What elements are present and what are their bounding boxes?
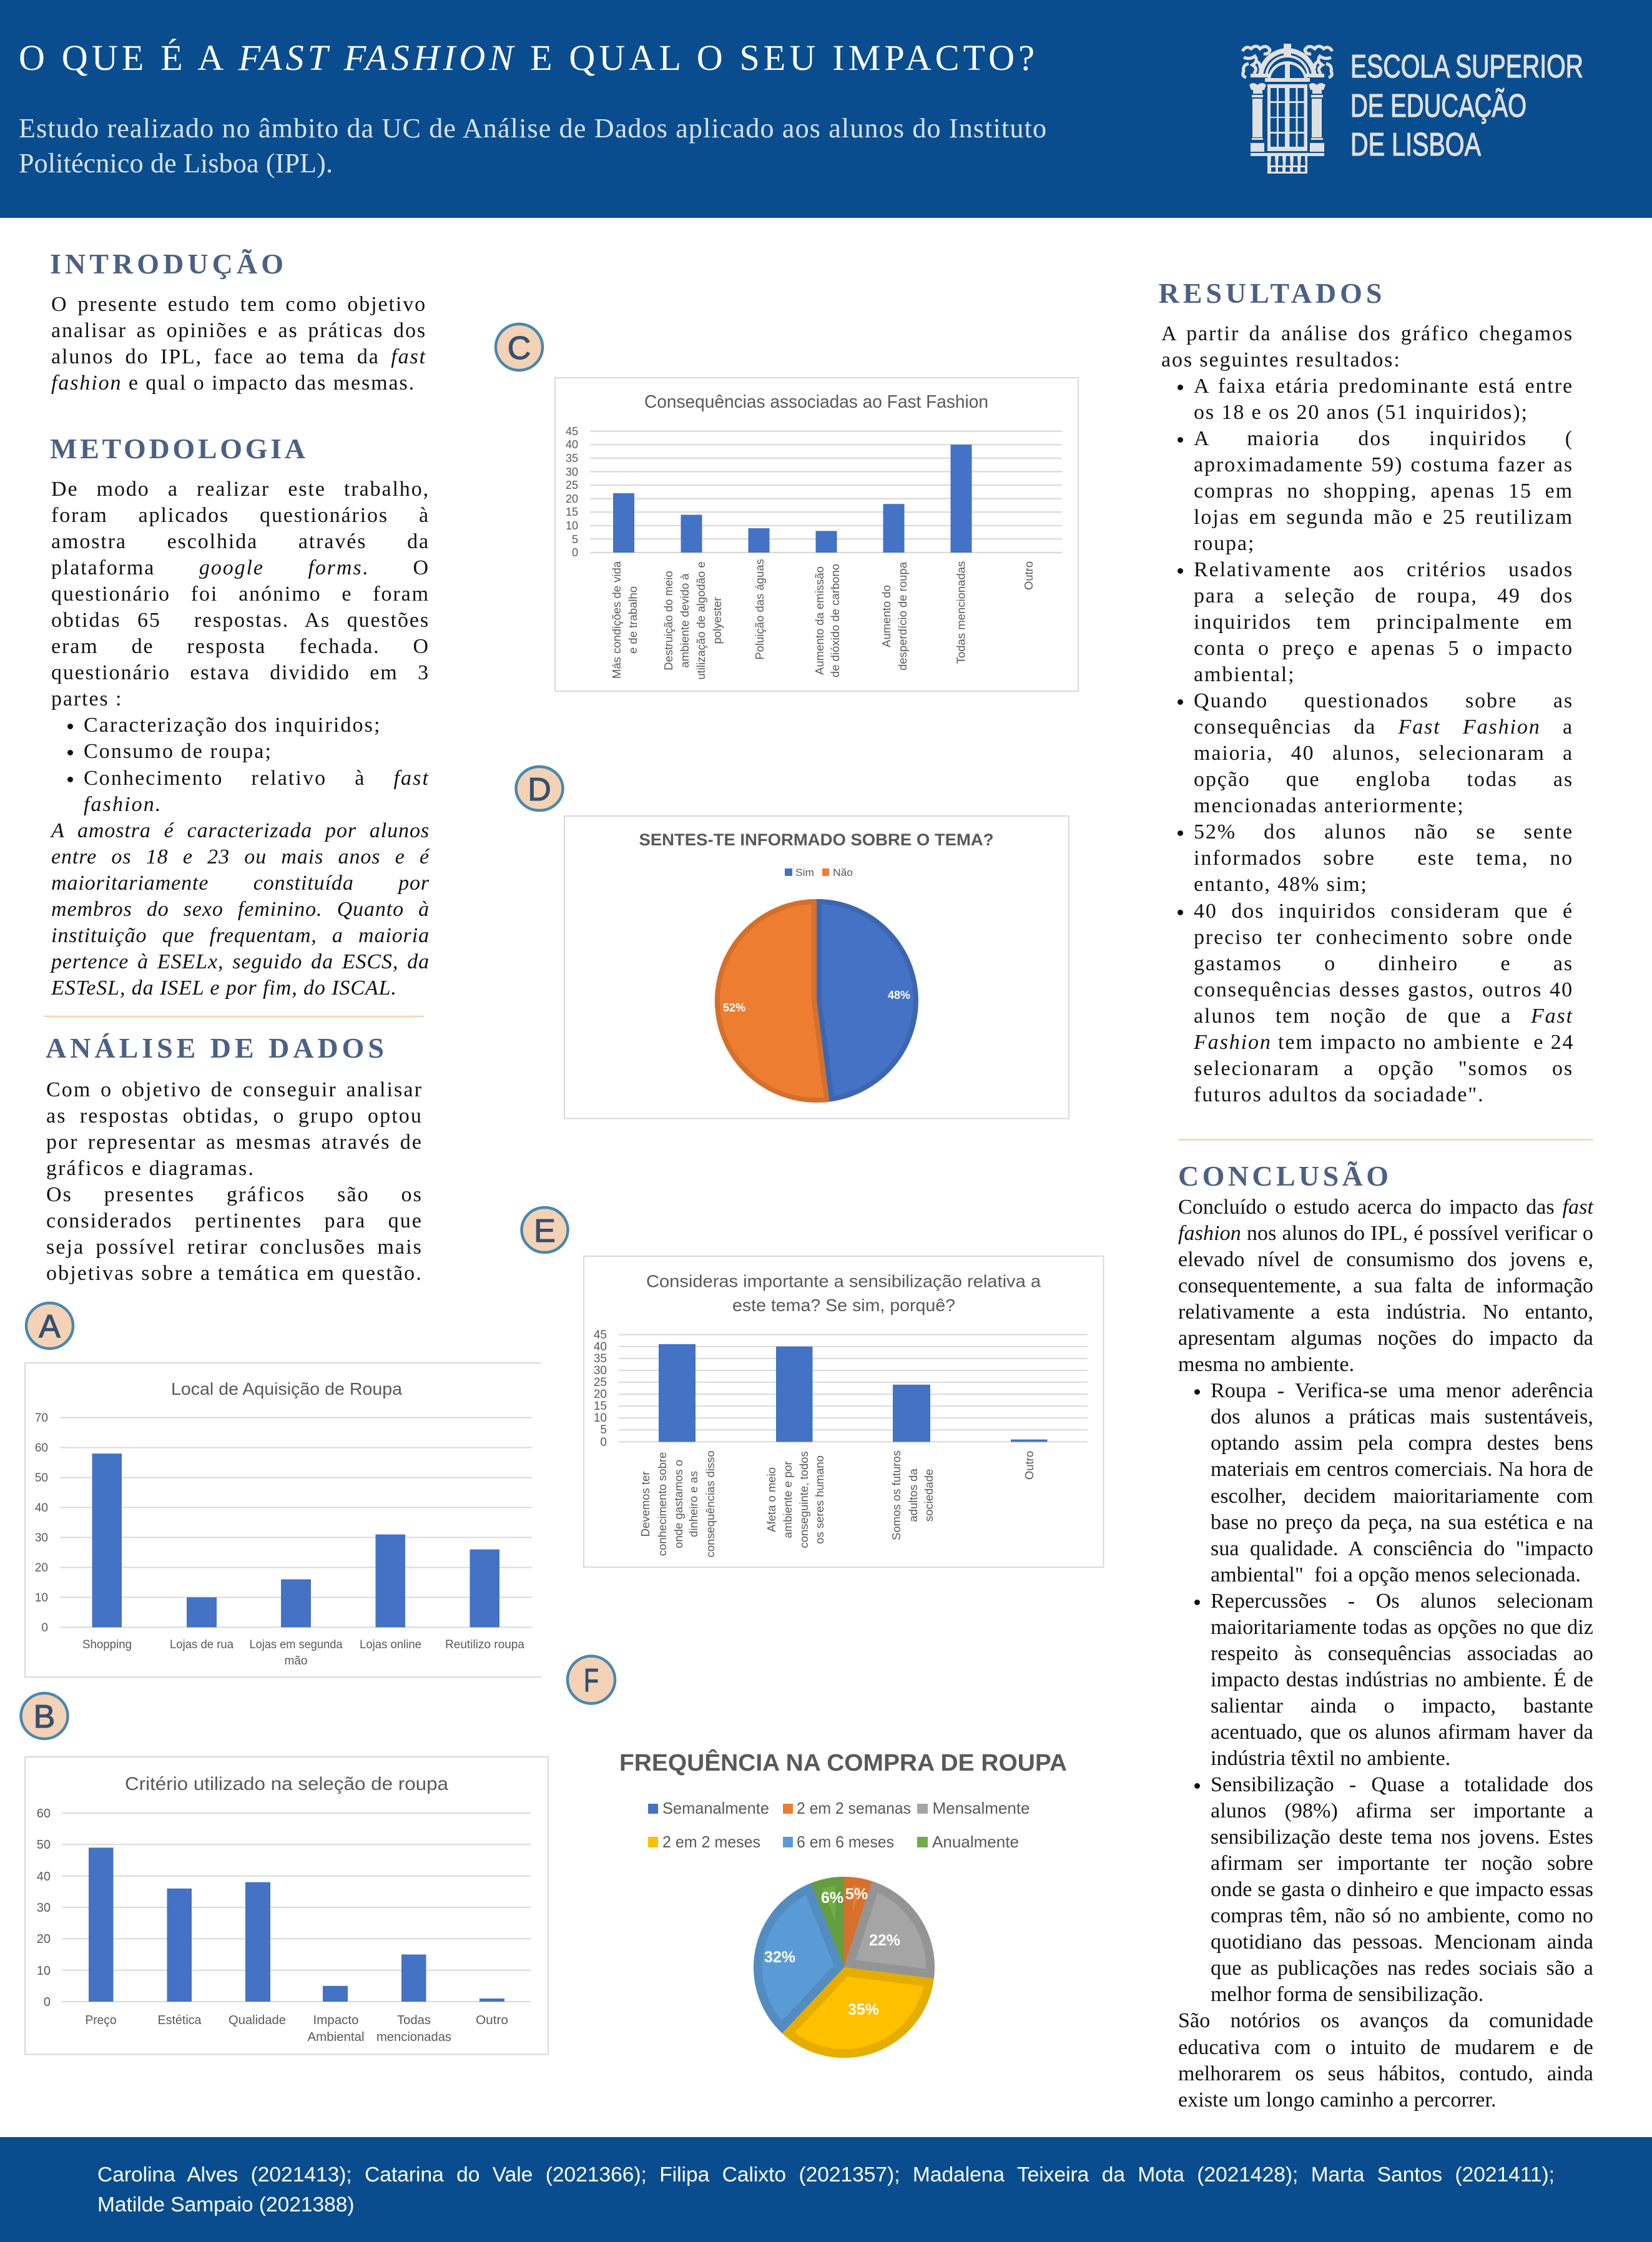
chart E category labels: conhecimento sobre [656, 1452, 669, 1556]
chart F legend: Semanalmente [662, 1799, 769, 1817]
chart B axis values: 10 [37, 1964, 51, 1978]
text: Resultados [1161, 322, 1574, 1106]
heading: Análise de Dados: ANÁLISE DE DADOS [46, 1032, 384, 1064]
chart B title: Critério utilizado na seleção de roupa [125, 1774, 448, 1794]
list: conclusões: compras têm, não só no ambiente, como no [1211, 1904, 1593, 1927]
chart C axis values: 15 [566, 506, 578, 518]
list: resultados: entanto, 48% sim; [1194, 873, 1368, 896]
text: Resultados: A partir da análise dos gráfico chegamos [1161, 322, 1573, 345]
text: caracterização da amostra: membros do sexo feminino. Quanto à [51, 898, 430, 921]
list: conclusões: salientar ainda o impacto, bastante [1211, 1694, 1593, 1718]
chart B axis values: 30 [37, 1901, 51, 1915]
list: conclusões [1194, 1379, 1593, 2006]
list: conclusões: dos alunos a práticas mais sustentáveis, [1211, 1405, 1593, 1428]
text: Análise de Dados [46, 1078, 423, 1285]
chart C category labels: Aumento do [880, 585, 893, 647]
chart A category labels: mão [285, 1654, 307, 1668]
list: conclusões: impacto destas indústrias no ambiente. É de [1211, 1668, 1593, 1691]
chart D title: SENTES-TE INFORMADO SOBRE O TEMA? [639, 830, 994, 849]
text: nota final: existe um longo caminho a percorrer. [1178, 2088, 1497, 2112]
text: Conclusão [1178, 1196, 1594, 2112]
chart B axis values: 40 [37, 1870, 51, 1884]
chart A category labels [82, 1638, 524, 1668]
list: partes do questionário: Consumo de roupa; [84, 740, 272, 763]
ornaments [1242, 46, 1332, 77]
chart E title: este tema? Se sim, porquê? [732, 1296, 955, 1315]
chart E axis values [594, 1329, 607, 1449]
chart C category labels: Aumento da emissão [813, 566, 826, 675]
list: resultados: alunos tem noção de que a Fast [1194, 1005, 1573, 1028]
text: caracterização da amostra [50, 819, 430, 1000]
text: Análise de Dados: as respostas obtidas, o grupo optou [46, 1104, 423, 1128]
icon: window emblem [1242, 44, 1332, 174]
chart C axis values: 20 [566, 493, 578, 505]
text: caracterização da amostra: maioritariamente constituída por [51, 872, 430, 895]
chart C category labels: desperdício de roupa [896, 561, 909, 671]
text: Análise de Dados: gráficos e diagramas. [46, 1157, 255, 1180]
footer: autores: Carolina Alves (2021413); Catarina do Vale (2021366); Filipa Calixto (2021357); Madalena Teixeira da Mota (2021428); Marta Santos (2021411); [97, 2163, 1555, 2186]
logo text: ESCOLA SUPERIOR [1350, 48, 1583, 84]
text: Conclusão: elevado nível de consumismo dos jovens e, [1178, 1248, 1593, 1271]
chart C category labels: Outro [1022, 561, 1035, 590]
logo: Escola Superior de Educação de Lisboa [1242, 44, 1583, 174]
chart D legend [785, 867, 853, 878]
badge F [568, 1656, 615, 1703]
list: resultados: opção que engloba todas as [1194, 768, 1573, 791]
list: conclusões: respeito às consequências associadas ao [1211, 1642, 1593, 1665]
text: Resultados: aos seguintes resultados: [1161, 348, 1401, 371]
list: conclusões: escolher, decidem maioritariamente com [1211, 1485, 1593, 1508]
badge D: D [528, 772, 551, 808]
chart E axis values: 5 [600, 1423, 607, 1437]
list: partes do questionário: Conhecimento relativo à fast [84, 767, 430, 790]
badge E [522, 1207, 568, 1252]
chart B category labels: Outro [476, 2013, 508, 2027]
chart C category labels: Poluição das águas [753, 559, 766, 660]
chart F title: FREQUÊNCIA NA COMPRA DE ROUPA [619, 1749, 1067, 1776]
header band [0, 0, 1652, 218]
title: O QUE É A FAST FASHION E QUAL O SEU IMPACTO? [19, 37, 1035, 78]
chart A title: Local de Aquisição de Roupa [171, 1379, 402, 1399]
chart A axis values: 0 [41, 1621, 48, 1635]
chart C axis values: 5 [572, 533, 578, 546]
text: nota final [1178, 2009, 1593, 2112]
list: resultados: Fashion tem impacto no ambiente e 24 [1194, 1031, 1574, 1054]
text: Conclusão: relativamente a esta indústria. No entanto, [1178, 1300, 1593, 1324]
subtitle [19, 113, 1046, 179]
chart F legend: 2 em 2 semanas [797, 1799, 911, 1817]
list: resultados: A faixa etária predominante está entre [1194, 375, 1573, 398]
badge B [21, 1693, 67, 1739]
chart F legend: Anualmente [932, 1832, 1019, 1851]
chart D pie: 48% [888, 989, 910, 1001]
logo text [1350, 48, 1583, 162]
list: conclusões: melhor forma de sensibilização. [1211, 1983, 1483, 2006]
list: resultados: inquiridos tem principalmente em [1194, 611, 1573, 634]
chart E category labels: consequências disso [704, 1451, 717, 1557]
list: resultados: consequências da Fast Fashion a [1194, 715, 1573, 739]
chart F pie: 6% [821, 1889, 843, 1907]
text: nota final: melhorarem os seus hábitos, contudo, ainda [1178, 2062, 1593, 2085]
chart C: Consequências associadas ao Fast Fashion [555, 378, 1078, 691]
footer: autores [97, 2163, 1555, 2216]
badge B: B [34, 1699, 55, 1735]
chart F legend: 2 em 2 meses [662, 1832, 760, 1851]
text: Conclusão: apresentam algumas noções do impacto da [1178, 1327, 1593, 1350]
chart C axis values: 25 [566, 479, 578, 491]
chart E axis values: 35 [594, 1352, 607, 1365]
chart F pie: 35% [848, 2001, 879, 2018]
text: caracterização da amostra: instituição que frequentam, a maioria [51, 924, 430, 947]
chart A category labels: Shopping [82, 1638, 132, 1651]
chart C category labels: polyester [710, 597, 724, 644]
chart E category labels: Somos os futuros [890, 1450, 903, 1540]
list: resultados: Quando questionados sobre as [1194, 689, 1573, 712]
chart F: Frequência na compra de roupa [619, 1749, 1067, 2058]
logo text: DE EDUCAÇÃO [1350, 87, 1527, 124]
list: conclusões: sensibilização deste tema nos jovens. Estes [1211, 1826, 1593, 1849]
chart E axis values: 45 [594, 1329, 607, 1342]
text: Conclusão: fashion nos alunos do IPL, é possível verificar o [1178, 1222, 1593, 1245]
chart F pie: 22% [869, 1932, 900, 1949]
list: conclusões: Repercussões - Os alunos selecionam [1211, 1590, 1593, 1613]
chart E category labels: ambiente e por [781, 1461, 794, 1538]
chart A bars [92, 1453, 499, 1627]
list: resultados [1178, 375, 1574, 1106]
list: conclusões: Roupa - Verifica-se uma menor aderência [1211, 1379, 1593, 1402]
text: caracterização da amostra: entre os 18 e 23 ou mais anos e é [51, 845, 430, 868]
list: resultados: roupa; [1194, 532, 1255, 555]
chart F legend: Mensalmente [933, 1799, 1030, 1817]
chart C category labels: e de trabalho [626, 586, 639, 654]
chart E axis values: 0 [600, 1436, 607, 1449]
text: Introdução: O presente estudo tem como objetivo [51, 292, 426, 316]
chart B category labels: Impacto [313, 2013, 358, 2027]
chart C axis values: 0 [572, 546, 578, 559]
subtitle: Politécnico de Lisboa (IPL). [19, 148, 333, 179]
chart E category labels: Outro [1023, 1451, 1036, 1480]
text: Análise de Dados: Os presentes gráficos são os [46, 1183, 423, 1206]
chart A category labels: Lojas online [360, 1638, 421, 1651]
list: conclusões: indústria têxtil no ambiente. [1211, 1747, 1450, 1770]
chart A axis values: 30 [35, 1532, 48, 1545]
badge C [496, 324, 543, 370]
list: resultados: conta o preço e apenas 5 o impacto [1194, 637, 1573, 660]
list: resultados: compras no shopping, apenas 15 em [1194, 479, 1573, 503]
chart E title: Consideras importante a sensibilização relativa a [646, 1271, 1041, 1291]
chart D pie: 52% [723, 1001, 745, 1014]
subtitle: Estudo realizado no âmbito da UC de Análise de Dados aplicado aos alunos do Instituto [19, 113, 1046, 144]
chart D legend: Não [833, 867, 853, 878]
text: Análise de Dados: por representar as mesmas através de [46, 1131, 423, 1154]
chart A axis values [35, 1412, 48, 1635]
list: partes do questionário: fashion. [84, 793, 162, 816]
chart C category labels: utilização de algodão e [694, 561, 707, 680]
list: resultados: gastamos o dinheiro e as [1194, 952, 1573, 975]
text: caracterização da amostra: pertence à ESELx, seguido da ESCS, da [51, 950, 430, 973]
heading: Conclusão: CONCLUSÃO [1178, 1160, 1389, 1192]
chart F pie [754, 1877, 935, 2058]
chart E title [646, 1271, 1041, 1315]
chart E category labels: Devemos ter [639, 1472, 652, 1536]
chart F legend: 6 em 6 meses [797, 1832, 894, 1851]
chart C axis values [566, 425, 578, 559]
list: resultados: ambiental; [1194, 663, 1296, 686]
chart E category labels: os seres humano [813, 1455, 826, 1544]
chart E category labels: Afeta o meio [765, 1467, 778, 1532]
chart C category labels: Más condições de vida [610, 561, 623, 679]
list: resultados: Relativamente aos critérios usados [1194, 558, 1573, 581]
heading: Metodologia: METODOLOGIA [50, 433, 305, 465]
list: resultados: preciso ter conhecimento sobre onde [1194, 926, 1573, 949]
chart B bars [89, 1847, 504, 2002]
chart B axis values: 20 [37, 1932, 51, 1946]
logo text: DE LISBOA [1350, 126, 1481, 162]
text: Metodologia: eram de resposta fechada. O [51, 635, 430, 658]
chart E axis values: 30 [594, 1364, 607, 1377]
heading: Resultados: RESULTADOS [1159, 277, 1382, 309]
badge E: E [534, 1213, 556, 1249]
chart A axis values: 10 [35, 1591, 48, 1605]
list: resultados: para a seleção de roupa, 49 dos [1194, 584, 1573, 607]
list: resultados: mencionadas anteriormente; [1194, 794, 1465, 817]
text: Introdução: alunos do IPL, face ao tema da fast [51, 345, 426, 368]
chart C axis values: 30 [566, 466, 578, 478]
list: conclusões: onde se gasta o dinheiro e que impacto essas [1211, 1878, 1593, 1901]
chart C bars [613, 445, 971, 553]
chart D legend: Sim [795, 867, 814, 878]
chart D pie [715, 899, 918, 1103]
chart E category labels: onde gastamos o [672, 1460, 685, 1548]
chart B category labels: Preço [85, 2013, 116, 2027]
list: resultados: aproximadamente 59) costuma fazer as [1194, 453, 1573, 476]
text: Conclusão: mesma no ambiente. [1178, 1353, 1354, 1376]
chart E axis values: 20 [594, 1388, 607, 1401]
list: conclusões: optando assim pela compra destes bens [1211, 1432, 1593, 1455]
text: Metodologia: De modo a realizar este trabalho, [51, 478, 430, 501]
chart E category labels: dinheiro e as [687, 1471, 700, 1537]
list: partes do questionário: Caracterização dos inquiridos; [84, 714, 381, 737]
text: Análise de Dados: objetivas sobre a temática em questão. [46, 1262, 423, 1285]
chart A category labels: Reutilizo roupa [445, 1638, 524, 1651]
text: nota final: São notórios os avanços da comunidade [1178, 2009, 1593, 2032]
list: conclusões: sua qualidade. A consciência do "impacto [1211, 1537, 1593, 1560]
chart E axis values: 25 [594, 1376, 607, 1389]
chart B category labels: Qualidade [229, 2013, 286, 2027]
list: resultados: consequências desses gastos, outros 40 [1194, 978, 1573, 1001]
chart B axis values: 50 [37, 1838, 51, 1852]
text: Metodologia: amostra escolhida através da [51, 530, 430, 553]
chart A category labels: Lojas de rua [170, 1638, 234, 1651]
list: conclusões: quotidiano das pessoas. Mencionam ainda [1211, 1930, 1593, 1954]
chart E category labels: conseguinte, todos [797, 1451, 810, 1548]
chart C axis values: 45 [566, 425, 578, 438]
chart B category labels: Ambiental [307, 2030, 365, 2044]
text: Metodologia: plataforma google forms. O [51, 556, 430, 579]
chart C category labels: ambiente devido à [678, 573, 691, 668]
chart F pie: 5% [845, 1886, 868, 1903]
list: resultados: 40 dos inquiridos consideram que é [1194, 900, 1573, 923]
list: conclusões: afirmam ser importante ter noção sobre [1211, 1852, 1593, 1875]
badge D [516, 767, 563, 810]
chart A category labels: Lojas em segunda [250, 1638, 343, 1651]
text: Metodologia: questionário estava dividido em 3 [51, 661, 430, 684]
chart B category labels: mencionadas [376, 2030, 451, 2044]
chart B: Critério utilizado na seleção de roupa [25, 1757, 548, 2054]
list: conclusões: base no preço da peça, na sua estética e na [1211, 1511, 1593, 1534]
chart A: Local de Aquisição de Roupa [25, 1363, 541, 1677]
chart B category labels: Todas [397, 2013, 431, 2027]
chart A axis values: 60 [35, 1442, 48, 1455]
list: conclusões: materiais em centros comerciais. Na hora de [1211, 1458, 1593, 1481]
badge A [26, 1303, 73, 1349]
chart A axis values: 50 [35, 1472, 48, 1485]
text: Conclusão: consequentemente, a sua falta de informação [1178, 1274, 1593, 1297]
text: Introdução: analisar as opiniões e as práticas dos [51, 319, 426, 342]
chart F pie: 32% [764, 1949, 795, 1966]
text: Metodologia: partes : [51, 687, 122, 710]
chart C axis values: 10 [566, 519, 578, 532]
text: Análise de Dados: seja possível retirar conclusões mais [46, 1236, 423, 1259]
chart C category labels: de dióxido de carbono [828, 564, 842, 677]
chart E category labels: adultos da [907, 1468, 920, 1522]
text: Metodologia [50, 478, 430, 1000]
footer band [0, 2137, 1652, 2242]
badge C: C [508, 330, 531, 366]
chart B category labels: Estética [157, 2013, 202, 2027]
badge F: F [584, 1663, 599, 1699]
list: resultados: futuros adultos da sociadade". [1194, 1083, 1485, 1106]
text: Conclusão: Concluído o estudo acerca do impacto das fast [1178, 1196, 1593, 1219]
chart E axis values: 40 [594, 1340, 607, 1354]
list: resultados: 52% dos alunos não se sente [1194, 820, 1573, 843]
chart E category labels: sociedade [922, 1469, 935, 1522]
chart E axis values: 10 [594, 1412, 607, 1425]
list: conclusões: maioritariamente todas as opções no que diz [1211, 1616, 1593, 1639]
badge A: A [39, 1309, 61, 1345]
chart C axis values: 35 [566, 452, 578, 465]
chart C category labels: Todas mencionadas [954, 561, 968, 664]
list: partes do questionário [67, 714, 430, 816]
text: Introdução [51, 292, 426, 395]
chart A axis values: 40 [35, 1502, 48, 1515]
list: conclusões: Sensibilização - Quase a totalidade dos [1211, 1773, 1593, 1796]
list: resultados: informados sobre este tema, no [1194, 847, 1573, 870]
chart A axis values: 20 [35, 1561, 48, 1575]
chart B category labels [85, 2013, 508, 2044]
text: caracterização da amostra: A amostra é caracterizada por alunos [51, 819, 430, 842]
text: Metodologia: obtidas 65 respostas. As questões [51, 609, 430, 632]
text: Metodologia: foram aplicados questionários à [51, 504, 430, 527]
chart C axis values: 40 [566, 438, 578, 451]
text: Introdução: fashion e qual o impacto das mesmas. [51, 371, 415, 395]
chart E bars [659, 1344, 1048, 1442]
text: caracterização da amostra: ESTeSL, da ISEL e por fim, do ISCAL. [51, 976, 397, 1000]
chart B axis values [37, 1807, 51, 2009]
list: resultados: selecionaram a opção "somos os [1194, 1057, 1573, 1080]
text: Análise de Dados: Com o objetivo de conseguir analisar [46, 1078, 423, 1101]
chart C category labels [610, 559, 1035, 680]
chart C title: Consequências associadas ao Fast Fashion [644, 392, 988, 412]
list: resultados: A maioria dos inquiridos ( [1194, 427, 1573, 450]
heading: Introdução: INTRODUÇÃO [50, 248, 283, 280]
text: Análise de Dados: considerados pertinentes para que [46, 1209, 423, 1232]
list: conclusões: que as publicações nas redes sociais são a [1211, 1957, 1593, 1980]
footer: autores: Matilde Sampaio (2021388) [97, 2193, 355, 2216]
list: resultados: maioria, 40 alunos, selecionaram a [1194, 742, 1573, 765]
text: nota final: educativa com o intuito de mudarem e de [1178, 2035, 1593, 2059]
list: resultados: lojas em segunda mão e 25 reutilizam [1194, 506, 1573, 529]
chart B axis values: 0 [44, 1995, 51, 2009]
chart C category labels: Destruição do meio [662, 571, 675, 671]
chart E: Consideras importante a sensibilização [584, 1256, 1104, 1567]
list: conclusões: acentuado, que os alunos afirmam haver da [1211, 1721, 1593, 1744]
chart D: Sentes-te informado sobre o tema? [564, 816, 1069, 1119]
chart E axis values: 15 [594, 1400, 607, 1413]
list: resultados: os 18 e os 20 anos (51 inquiridos); [1194, 401, 1528, 424]
chart A axis values: 70 [35, 1412, 48, 1425]
list: conclusões: ambiental" foi a opção menos selecionada. [1211, 1563, 1581, 1586]
chart E category labels [639, 1450, 1036, 1557]
chart B axis values: 60 [37, 1807, 51, 1821]
text: Metodologia: questionário foi anónimo e foram [51, 583, 430, 606]
chart F legend [648, 1799, 1030, 1851]
list: conclusões: alunos (98%) afirma ser importante a [1211, 1799, 1593, 1822]
